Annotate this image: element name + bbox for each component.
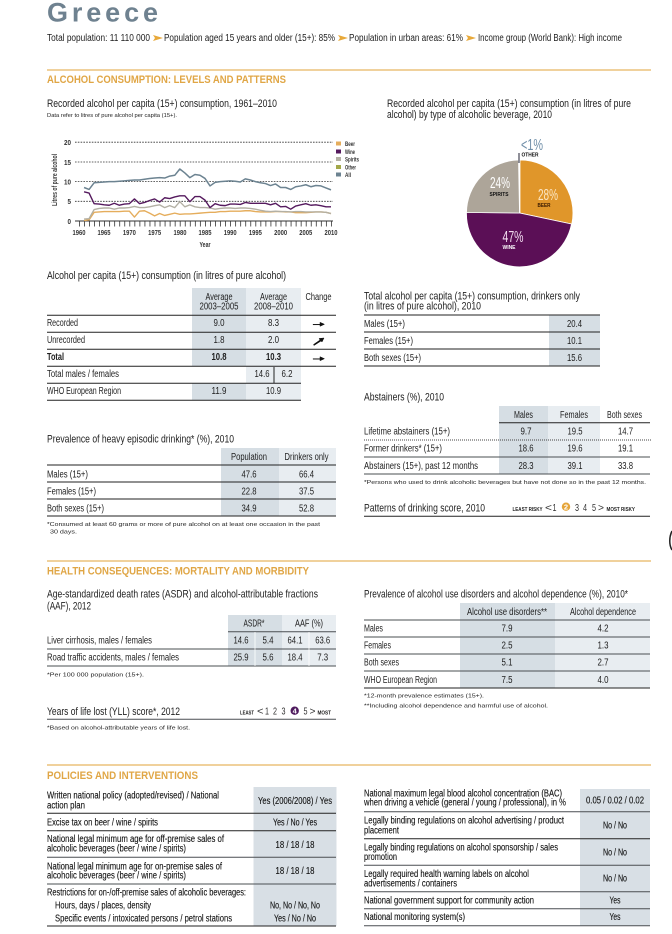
table: heavy episodic drinking: Females (15+) bbox=[47, 487, 96, 498]
table: policies right: promotion bbox=[364, 852, 397, 863]
patterns of drinking score: 2 bbox=[564, 502, 568, 512]
table: heavy episodic drinking: 66.4 bbox=[299, 470, 314, 481]
table: death rates and AAF: Liver cirrhosis, males / females bbox=[47, 636, 152, 647]
table: death rates and AAF: 25.9 bbox=[234, 653, 249, 664]
table: policies left: 18 / 18 / 18 bbox=[276, 840, 315, 851]
pie chart: beverage types: SPIRITS bbox=[490, 192, 509, 198]
line chart: consumption 1961-2010: 2010 bbox=[324, 228, 338, 237]
patterns of drinking score: 5 bbox=[592, 502, 596, 514]
table: policies left: No, No / No, No bbox=[270, 901, 320, 912]
table: death rates and AAF: 7.3 bbox=[317, 653, 329, 664]
table: alcohol per capita consumption: Change bbox=[306, 292, 332, 303]
table: alcohol use disorders: 2.5 bbox=[502, 641, 513, 652]
table: death rates and AAF: 64.1 bbox=[288, 636, 303, 647]
patterns of drinking score: 3 bbox=[575, 502, 579, 514]
patterns of drinking score bbox=[364, 502, 650, 516]
table: policies right: Legally binding regulations on alcohol sponsorship / sales bbox=[364, 843, 558, 854]
table: policies left: Excise tax on beer / wine / spirits bbox=[47, 818, 158, 829]
table: alcohol use disorders: 4.2 bbox=[598, 624, 609, 635]
table: heavy episodic drinking: Drinkers only bbox=[284, 452, 328, 463]
table: alcohol per capita consumption: Average bbox=[260, 292, 287, 303]
years of life lost score: 3 bbox=[282, 706, 286, 718]
table: alcohol use disorders: WHO European Region bbox=[364, 675, 437, 686]
table: policies right: No / No bbox=[603, 874, 627, 885]
table: death rates and AAF: (AAF), 2012 bbox=[47, 600, 91, 612]
table: policies right: Yes bbox=[610, 895, 620, 906]
table: heavy episodic drinking: Both sexes (15+) bbox=[47, 504, 104, 515]
patterns of drinking score: 1 bbox=[552, 502, 557, 514]
table: drinkers only: Females (15+) bbox=[364, 336, 413, 347]
heading: line chart: Recorded alcohol per capita (15+) consumption, 1961–2010 bbox=[47, 98, 277, 110]
table: abstainers: Both sexes bbox=[607, 410, 642, 421]
table: policies right: Legally binding regulations on alcohol advertising / product bbox=[364, 815, 564, 826]
table: abstainers bbox=[364, 392, 651, 486]
table: alcohol per capita consumption: Total males / females bbox=[47, 369, 119, 380]
table: alcohol per capita consumption bbox=[47, 270, 336, 400]
table: alcohol use disorders: Males bbox=[364, 624, 383, 635]
line chart: consumption 1961-2010: 20 bbox=[64, 138, 71, 147]
line chart: consumption 1961-2010: Litres of pure alcohol bbox=[50, 154, 59, 206]
table: abstainers: 28.3 bbox=[518, 461, 534, 472]
table: alcohol per capita consumption: 2008–2010 bbox=[254, 302, 293, 313]
table: death rates and AAF: Age-standardized death rates (ASDR) and alcohol-attributable fractions bbox=[47, 589, 318, 601]
line chart: consumption 1961-2010: 15 bbox=[64, 158, 72, 167]
table: alcohol per capita consumption: 8.3 bbox=[268, 318, 279, 329]
table: policies right bbox=[363, 789, 650, 926]
table: heavy episodic drinking: 52.8 bbox=[299, 504, 314, 515]
table: alcohol use disorders: *12-month prevalence estimates (15+). bbox=[364, 694, 485, 700]
table: alcohol use disorders: 7.9 bbox=[502, 624, 513, 635]
table: alcohol per capita consumption: 10.3 bbox=[266, 352, 281, 363]
patterns of drinking score: < bbox=[545, 502, 552, 514]
pie chart: beverage types: BEER bbox=[538, 203, 551, 209]
table: alcohol per capita consumption: Average bbox=[206, 292, 233, 303]
years of life lost score: 4 bbox=[293, 706, 298, 716]
table: alcohol per capita consumption: Unrecorded bbox=[47, 335, 85, 346]
table: policies left: Written national policy (adopted/revised) / National bbox=[47, 790, 219, 801]
icon: arrow stable bbox=[313, 322, 324, 326]
table: policies right: 0.05 / 0.02 / 0.02 bbox=[586, 795, 644, 806]
table: alcohol per capita consumption: 14.6 bbox=[254, 369, 270, 380]
pie chart: beverage types: <1% bbox=[521, 137, 543, 154]
table: death rates and AAF: 5.4 bbox=[262, 636, 274, 647]
pie chart: beverage types: 24% bbox=[490, 175, 510, 192]
pie chart: beverage types: OTHER bbox=[522, 152, 539, 158]
table: abstainers: 33.8 bbox=[618, 461, 633, 472]
table: abstainers: 19.6 bbox=[568, 444, 583, 454]
table: death rates and AAF: Road traffic accidents, males / females bbox=[47, 653, 179, 664]
table: drinkers only: 10.1 bbox=[567, 336, 582, 347]
table: death rates and AAF bbox=[47, 589, 336, 679]
pie chart: beverage types: 28% bbox=[538, 187, 558, 204]
table: alcohol use disorders: 2.7 bbox=[598, 658, 609, 669]
table: policies right: Yes bbox=[610, 912, 620, 923]
country facts line: Total population: 11 110 000 bbox=[47, 33, 150, 44]
line chart: consumption 1961-2010: 0 bbox=[68, 217, 71, 226]
table: policies left: Yes / No / Yes bbox=[273, 818, 317, 829]
line chart: consumption 1961-2010 bbox=[50, 138, 359, 249]
line chart: consumption 1961-2010: 1990 bbox=[224, 228, 237, 237]
table: policies left: alcoholic beverages (beer / wine / spirits) bbox=[47, 871, 186, 882]
table: policies right: National maximum legal blood alcohol concentration (BAC) bbox=[364, 789, 562, 800]
table: alcohol use disorders: Alcohol use disorders** bbox=[467, 607, 547, 618]
table: alcohol use disorders: 1.3 bbox=[598, 641, 609, 652]
years of life lost score: 5 bbox=[304, 706, 308, 718]
years of life lost score: > bbox=[310, 706, 316, 718]
line chart: consumption 1961-2010: 2005 bbox=[299, 228, 313, 237]
table: alcohol per capita consumption: WHO European Region bbox=[47, 386, 121, 397]
line chart: consumption 1961-2010: All bbox=[345, 173, 351, 179]
table: heavy episodic drinking: Males (15+) bbox=[47, 470, 88, 481]
table: policies left: action plan bbox=[47, 801, 85, 812]
table: drinkers only: 20.4 bbox=[567, 319, 582, 330]
line chart: consumption 1961-2010: 1965 bbox=[98, 228, 111, 237]
years of life lost score: 1 bbox=[265, 706, 269, 718]
section: policies and interventions: POLICIES AND INTERVENTIONS bbox=[47, 770, 198, 782]
table: abstainers: 18.6 bbox=[518, 444, 534, 454]
pie chart: beverage types: 47% bbox=[502, 229, 524, 246]
years of life lost score: *Based on alcohol-attributable years of life lost. bbox=[47, 725, 191, 731]
years of life lost score: LEAST bbox=[240, 710, 254, 716]
table: policies right: Legally required health warning labels on alcohol bbox=[364, 869, 529, 880]
line chart: consumption 1961-2010: 1985 bbox=[198, 228, 212, 237]
years of life lost score: Years of life lost (YLL) score*, 2012 bbox=[47, 706, 180, 718]
table: heavy episodic drinking: Prevalence of heavy episodic drinking* (%), 2010 bbox=[47, 433, 234, 445]
table: policies left: Restrictions for on-/off-premise sales of alcoholic beverages: bbox=[47, 888, 246, 899]
table: policies left: Yes (2006/2008) / Yes bbox=[258, 796, 332, 807]
line chart: consumption 1961-2010: 10 bbox=[64, 178, 71, 186]
table: policies right: No / No bbox=[603, 820, 627, 831]
years of life lost score: < bbox=[257, 706, 264, 718]
table: abstainers: 9.7 bbox=[520, 426, 532, 438]
table: alcohol per capita consumption: 10.8 bbox=[212, 352, 227, 363]
icon: arrow stable bbox=[313, 357, 324, 361]
table: alcohol per capita consumption: Total bbox=[47, 352, 64, 363]
table: heavy episodic drinking: 30 days. bbox=[50, 529, 78, 535]
table: abstainers: Abstainers (%), 2010 bbox=[364, 392, 444, 404]
table: alcohol per capita consumption: 1.8 bbox=[214, 335, 225, 346]
table: death rates and AAF: 63.6 bbox=[315, 636, 331, 647]
table: abstainers: Abstainers (15+), past 12 months bbox=[364, 461, 478, 472]
table: policies left: Specific events / intoxicated persons / petrol stations bbox=[55, 914, 232, 925]
table: alcohol per capita consumption: 10.9 bbox=[266, 386, 281, 397]
table: policies left: National legal minimum age for off-premise sales of bbox=[47, 834, 224, 845]
table: heavy episodic drinking bbox=[47, 433, 336, 535]
pie chart: beverage types: WINE bbox=[502, 245, 516, 251]
line chart: consumption 1961-2010: Beer bbox=[345, 142, 355, 148]
table: alcohol use disorders: 5.1 bbox=[502, 658, 513, 669]
line chart: consumption 1961-2010: Wine bbox=[345, 150, 355, 156]
table: policies left bbox=[47, 787, 336, 926]
table: alcohol use disorders: 7.5 bbox=[502, 675, 513, 686]
table: policies left: Yes / No / No bbox=[274, 914, 316, 925]
table: alcohol per capita consumption: Alcohol per capita (15+) consumption (in litres of pure alcohol) bbox=[47, 270, 286, 282]
patterns of drinking score: Patterns of drinking score, 2010 bbox=[364, 503, 485, 515]
line chart: consumption 1961-2010: 1995 bbox=[249, 228, 262, 237]
years of life lost score: MOST bbox=[318, 710, 331, 716]
country facts line bbox=[47, 33, 622, 44]
line chart: consumption 1961-2010: 5 bbox=[68, 197, 72, 206]
table: alcohol per capita consumption: Recorded bbox=[47, 318, 78, 329]
table: drinkers only: Males (15+) bbox=[364, 319, 405, 330]
table: alcohol per capita consumption: 2003–2005 bbox=[200, 302, 239, 313]
table: alcohol use disorders: 4.0 bbox=[598, 675, 609, 686]
table: policies left: 18 / 18 / 18 bbox=[276, 866, 315, 877]
table: death rates and AAF: *Per 100 000 population (15+). bbox=[47, 673, 145, 679]
patterns of drinking score: MOST RISKY bbox=[606, 507, 636, 513]
table: heavy episodic drinking: *Consumed at least 60 grams or more of pure alcohol on at least one occasion in the past bbox=[47, 522, 321, 528]
table: abstainers: *Persons who used to drink alcoholic beverages but have not done so in the past 12 months. bbox=[364, 480, 647, 486]
table: policies right: placement bbox=[364, 825, 399, 836]
table: abstainers: 14.7 bbox=[618, 426, 633, 438]
table: heavy episodic drinking: 22.8 bbox=[242, 487, 257, 498]
table: alcohol per capita consumption: 2.0 bbox=[268, 335, 279, 346]
line chart: consumption 1961-2010: 1960 bbox=[72, 228, 86, 237]
years of life lost score: 2 bbox=[273, 706, 277, 718]
table: heavy episodic drinking: Population bbox=[231, 452, 267, 463]
table: drinkers only: 15.6 bbox=[567, 353, 582, 364]
line chart: consumption 1961-2010: 1980 bbox=[174, 228, 186, 237]
table: policies right: advertisements / containers bbox=[364, 878, 457, 889]
section: health consequences: HEALTH CONSEQUENCES: MORTALITY AND MORBIDITY bbox=[47, 566, 310, 578]
heading: pie chart: alcohol) by type of alcoholic beverage, 2010 bbox=[387, 109, 552, 121]
table: drinkers only: Total alcohol per capita (15+) consumption, drinkers only bbox=[364, 291, 580, 303]
table: policies right: National monitoring system(s) bbox=[364, 912, 465, 923]
patterns of drinking score: LEAST RISKY bbox=[512, 507, 543, 513]
table: heavy episodic drinking: 34.9 bbox=[242, 504, 257, 515]
table: death rates and AAF: 5.6 bbox=[262, 653, 274, 664]
table: drinkers only: (in litres of pure alcohol), 2010 bbox=[364, 300, 481, 312]
table: alcohol use disorders: **Including alcohol dependence and harmful use of alcohol. bbox=[364, 703, 549, 709]
table: death rates and AAF: 18.4 bbox=[288, 653, 303, 664]
country facts line: Population aged 15 years and older (15+): 85% bbox=[164, 33, 335, 44]
icon: arrow rising bbox=[314, 338, 324, 346]
table: alcohol use disorders: Both sexes bbox=[364, 658, 399, 669]
line chart: consumption 1961-2010: Year bbox=[200, 240, 211, 249]
line chart: consumption 1961-2010: Other bbox=[345, 166, 356, 172]
country facts line: Income group (World Bank): High income bbox=[478, 33, 622, 44]
table: policies left: Hours, days / places, density bbox=[55, 901, 151, 912]
line chart: consumption 1961-2010: 1970 bbox=[123, 228, 136, 237]
table: abstainers: 19.1 bbox=[618, 444, 633, 454]
table: death rates and AAF: ASDR* bbox=[244, 619, 265, 630]
table: policies right: when driving a vehicle (general / young / professional), in % bbox=[363, 798, 566, 809]
line chart: consumption 1961-2010: 2000 bbox=[274, 228, 287, 237]
section: alcohol consumption: ALCOHOL CONSUMPTION: LEVELS AND PATTERNS bbox=[47, 74, 286, 86]
heading: pie chart bbox=[387, 98, 631, 121]
line chart: consumption 1961-2010: Spirits bbox=[345, 158, 359, 164]
line chart: consumption 1961-2010: 1975 bbox=[148, 228, 162, 237]
patterns of drinking score: 4 bbox=[583, 502, 587, 514]
table: abstainers: Former drinkers* (15+) bbox=[364, 444, 442, 454]
heading: line chart: Data refer to litres of pure alcohol per capita (15+). bbox=[47, 113, 177, 119]
table: policies left: alcoholic beverages (beer / wine / spirits) bbox=[47, 844, 186, 855]
years of life lost score bbox=[47, 706, 336, 731]
heading: line chart bbox=[47, 98, 277, 119]
table: policies right: No / No bbox=[603, 848, 627, 859]
table: abstainers: Lifetime abstainers (15+) bbox=[364, 426, 450, 438]
table: abstainers: 19.5 bbox=[568, 426, 583, 438]
country facts line: Population in urban areas: 61% bbox=[349, 33, 463, 44]
table: death rates and AAF: 14.6 bbox=[234, 636, 249, 647]
table: alcohol use disorders bbox=[364, 588, 650, 709]
table: alcohol use disorders: Females bbox=[364, 641, 391, 652]
table: heavy episodic drinking: 47.6 bbox=[242, 470, 257, 481]
table: drinkers only: Both sexes (15+) bbox=[364, 353, 421, 364]
table: drinkers only bbox=[364, 291, 600, 366]
table: death rates and AAF: AAF (%) bbox=[295, 619, 323, 630]
table: abstainers: Females bbox=[560, 410, 588, 421]
table: policies left: National legal minimum age for on-premise sales of bbox=[47, 862, 222, 873]
table: alcohol per capita consumption: 6.2 bbox=[282, 369, 293, 380]
table: alcohol per capita consumption: 9.0 bbox=[214, 318, 225, 329]
patterns of drinking score: > bbox=[598, 502, 604, 514]
table: alcohol per capita consumption: 11.9 bbox=[212, 386, 227, 397]
edge mark bbox=[670, 531, 672, 550]
table: abstainers: Males bbox=[514, 410, 533, 421]
table: policies right: National government support for community action bbox=[364, 895, 534, 906]
table: abstainers: 39.1 bbox=[568, 461, 583, 472]
pie chart: beverage types bbox=[466, 137, 573, 267]
table: alcohol use disorders: Alcohol dependence bbox=[570, 607, 636, 618]
table: heavy episodic drinking: 37.5 bbox=[299, 487, 314, 498]
